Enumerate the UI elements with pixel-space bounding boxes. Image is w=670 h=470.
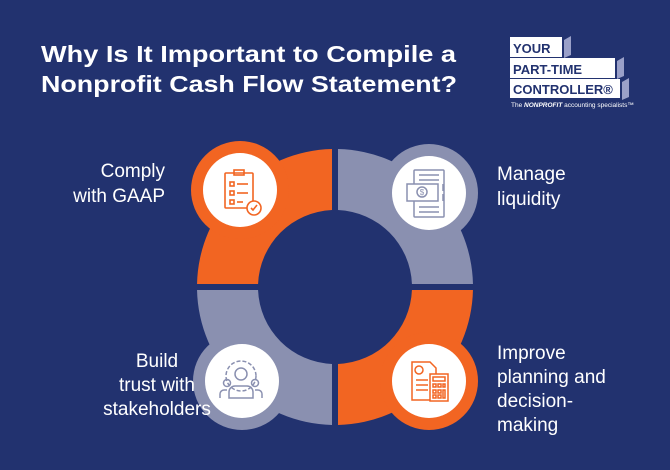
- ring: top-left orange: [191, 141, 332, 284]
- label: manage: [497, 164, 566, 210]
- icon: money statement: [392, 156, 466, 230]
- label: build trust: [103, 351, 211, 420]
- logo: [510, 36, 634, 109]
- label: comply: with GAAP: [72, 186, 165, 207]
- logo: CONTROLLER®: [513, 82, 613, 97]
- label: improve: [497, 343, 606, 436]
- ring: bottom-right orange: [338, 290, 478, 430]
- logo: The NONPROFIT accounting specialists™: [511, 102, 634, 109]
- label: comply: Comply: [101, 161, 165, 182]
- title: [41, 41, 457, 97]
- title: Nonprofit Cash Flow Statement?: [41, 71, 457, 97]
- label: build trust: Build: [136, 351, 178, 372]
- icon: money statement: $: [420, 188, 425, 197]
- label: improve: decision-: [497, 391, 573, 412]
- label: build trust: stakeholders: [103, 399, 211, 420]
- icon: checklist: [203, 153, 277, 227]
- label: improve: making: [497, 415, 558, 436]
- label: manage: liquidity: [497, 189, 561, 210]
- icon: invoice calculator: [392, 344, 466, 418]
- label: manage: Manage: [497, 164, 566, 185]
- icon: team gear: [205, 344, 279, 418]
- label: improve: planning and: [497, 367, 606, 388]
- ring: bottom-left grey: [193, 290, 332, 430]
- ring: top-right grey: [338, 144, 478, 284]
- title: Why Is It Important to Compile a: [41, 41, 456, 67]
- label: build trust: trust with: [119, 375, 195, 396]
- logo: YOUR: [513, 41, 551, 56]
- label: improve: Improve: [497, 343, 566, 364]
- logo: PART-TIME: [513, 62, 582, 77]
- label: comply: [72, 161, 165, 207]
